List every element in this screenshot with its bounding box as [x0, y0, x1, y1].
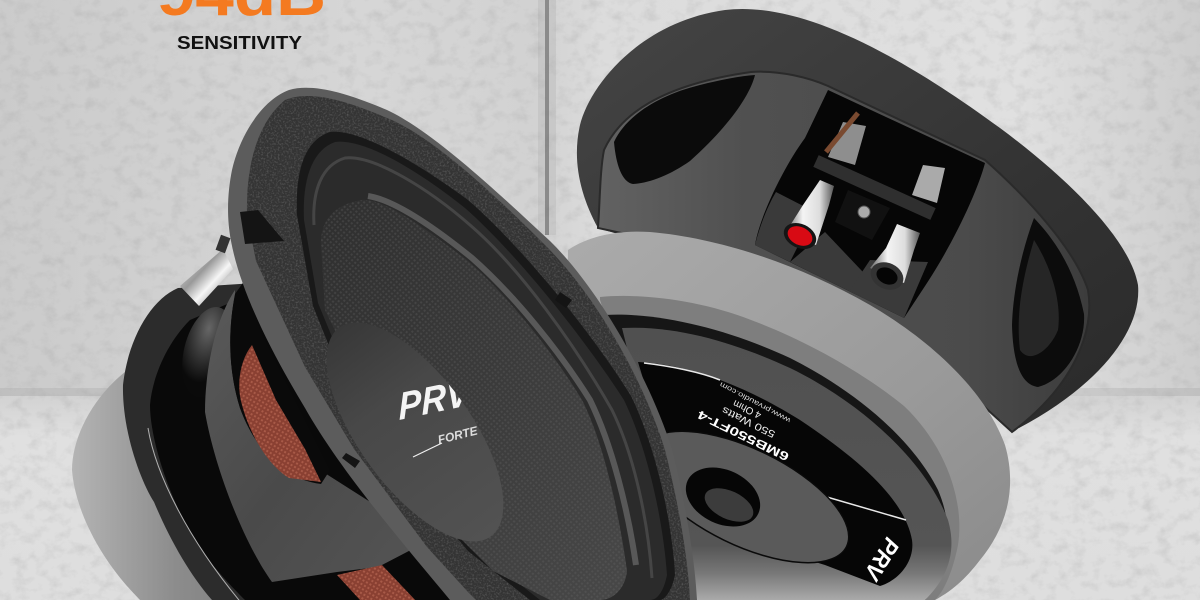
front speaker black inner plate	[150, 290, 470, 600]
logo PRV: PRV	[398, 370, 473, 429]
label highlight lines	[644, 363, 906, 520]
rim gasket groove	[297, 132, 675, 600]
chrome terminal	[180, 235, 233, 306]
label text: website: www.prvaudio.com	[719, 380, 793, 424]
terminal centre block	[835, 190, 890, 240]
front speaker magnet ring	[72, 360, 280, 600]
rear speaker vent hole	[676, 456, 770, 538]
glossy magnet shoulder	[174, 302, 242, 402]
copper lead wire	[826, 113, 858, 152]
logo underline	[413, 443, 442, 457]
speaker surround	[304, 142, 667, 600]
terminal screw	[858, 206, 870, 218]
label text: watts: 550 Watts	[720, 404, 777, 439]
left solder tab	[828, 122, 866, 165]
cone mesh texture	[321, 200, 627, 600]
label logo: PRV	[859, 533, 905, 586]
front speaker rim face	[240, 90, 700, 600]
rear speaker back plate	[600, 296, 959, 600]
positive terminal post	[780, 180, 834, 254]
rear speaker right vent window	[1012, 218, 1084, 387]
copper voice coil, lower	[337, 565, 419, 600]
terminal bar	[816, 161, 933, 214]
front speaker back plate	[123, 280, 470, 600]
dust cap logo	[400, 384, 478, 458]
back plate highlights	[148, 428, 256, 600]
front speaker vent window	[230, 280, 330, 484]
surround fold lines	[314, 158, 652, 578]
front speaker rim side	[228, 88, 697, 600]
label text: model: 6MB550FT-4	[695, 407, 791, 464]
rear speaker black label	[638, 362, 912, 586]
rear speaker basket	[598, 72, 1089, 432]
rear speaker flange	[577, 9, 1138, 428]
rear speaker left vent window	[614, 75, 755, 184]
front speaker basket arm	[205, 290, 430, 582]
heading: sensitivity label: SENSITIVITY	[177, 33, 302, 53]
right solder tab	[912, 165, 945, 203]
copper voice coil, upper	[239, 345, 321, 482]
logo FORTE: FORTE	[436, 423, 480, 447]
rear speaker pole plate	[622, 404, 868, 590]
rear speaker	[560, 9, 1138, 600]
rim notches	[240, 210, 572, 468]
negative terminal post	[866, 224, 920, 295]
dust cap	[294, 295, 536, 569]
front speaker	[72, 88, 700, 600]
label text: ohms: 4 Ohm	[732, 397, 763, 420]
rear speaker terminal bay	[755, 90, 985, 318]
cone outer band	[368, 196, 636, 565]
speaker cone	[321, 200, 627, 600]
rear speaker magnet ring	[560, 232, 1010, 600]
